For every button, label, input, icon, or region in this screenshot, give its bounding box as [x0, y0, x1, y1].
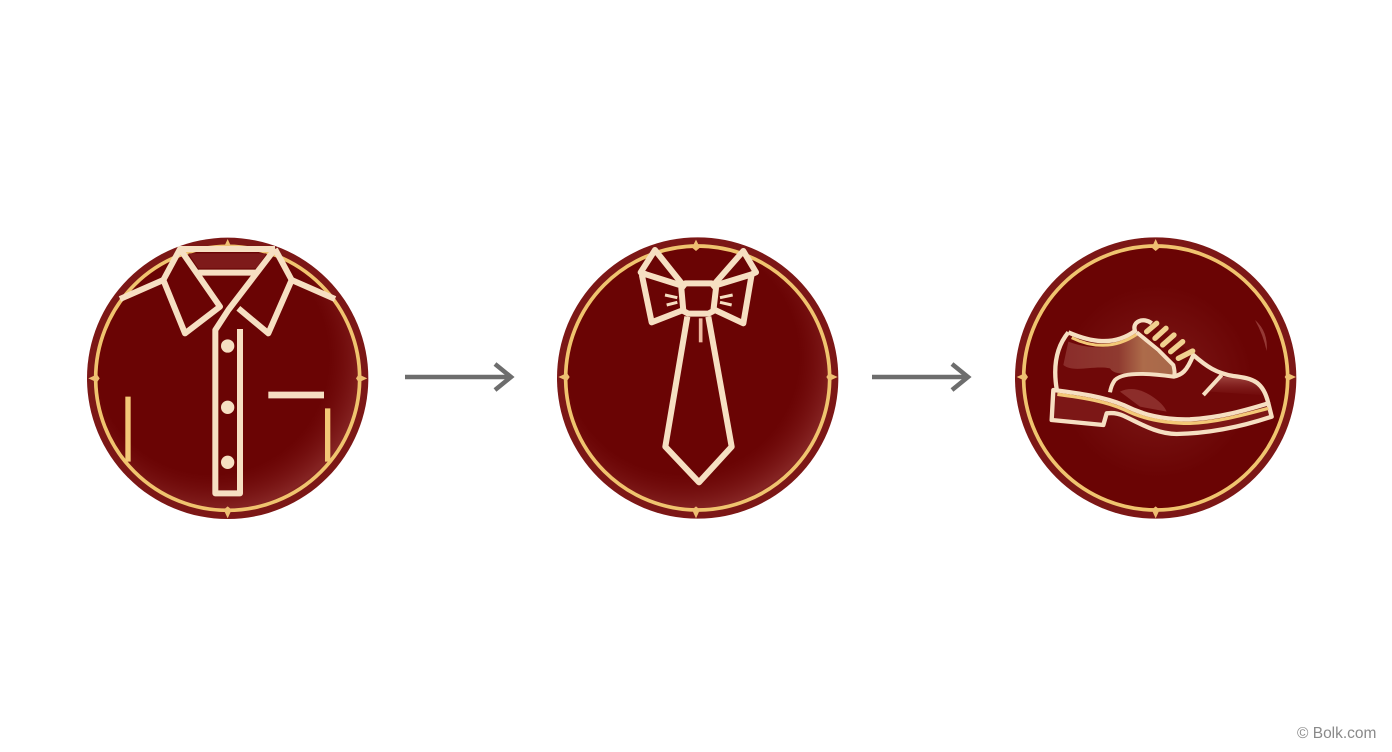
shirt pocket: [268, 385, 324, 405]
shirt placket: [215, 249, 275, 493]
watermark: © Bolk.com: [1297, 725, 1376, 742]
shoe laces: [1147, 323, 1193, 358]
icon: tie badge: [557, 237, 838, 519]
icon: shirt badge: [87, 238, 368, 519]
shirt collar: [120, 249, 335, 333]
arrow: shirt to tie: [405, 364, 511, 390]
tie blade: [665, 317, 732, 482]
icon: shoe badge: [1015, 237, 1296, 519]
bow tie wings: [641, 250, 756, 323]
shoe body: [1055, 320, 1268, 418]
arrow: tie to shoe: [872, 364, 968, 390]
shirt side seams: [128, 397, 328, 462]
shoe sole: [1052, 390, 1272, 434]
